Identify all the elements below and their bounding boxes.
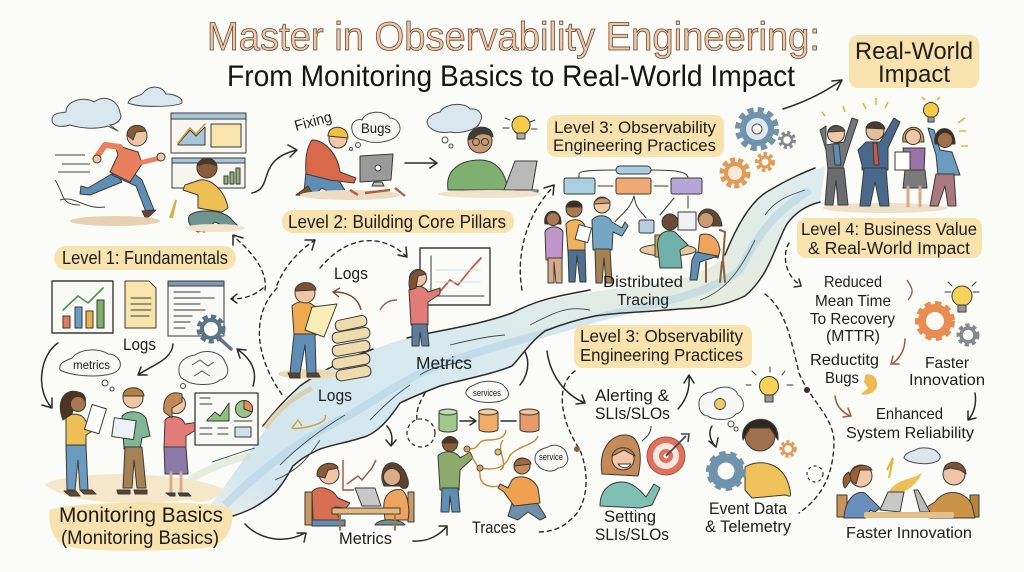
- label: Faster Innovation side: Faster: [925, 355, 970, 372]
- magnifier gear: [199, 317, 231, 349]
- trace path: [467, 430, 538, 487]
- woman: [600, 435, 660, 508]
- arrow: level 4 to outcomes: [785, 243, 801, 287]
- presentation board: [195, 393, 258, 445]
- label: Alerting and SLIs/SLOs: Alerting &: [595, 387, 669, 405]
- gears: top cluster: [722, 110, 794, 186]
- scene: celebrating team: [820, 97, 968, 213]
- label: Reduced MTTR: To Recovery: [810, 311, 895, 328]
- thought cloud: metrics: metrics: [73, 360, 110, 372]
- curved red mark: [380, 300, 397, 310]
- chart board: [420, 248, 490, 305]
- clouds: [52, 98, 121, 131]
- bar chart panel: [52, 281, 113, 333]
- label: Reduced MTTR: [810, 274, 895, 345]
- heading: Level 4: & Real-World Impact: [808, 238, 970, 258]
- heading: Real-World Impact: Real-World: [855, 38, 973, 65]
- lightbulb: [924, 102, 938, 122]
- outcome arrows: [835, 339, 976, 420]
- gear large: [709, 454, 743, 488]
- label: Distributed Tracing: [603, 274, 683, 309]
- label: Setting: [604, 508, 656, 526]
- label: Metrics bottom: Metrics: [339, 530, 392, 548]
- thought cloud: services: services: [473, 388, 501, 399]
- scene: level 1 panels: [52, 281, 231, 354]
- scene: event data and telemetry: [699, 367, 795, 536]
- river path: [190, 167, 825, 530]
- table: [864, 512, 954, 518]
- person: woman yellow: [60, 391, 106, 496]
- label: Logs at river: Logs: [318, 387, 352, 405]
- log pile: [331, 315, 372, 382]
- man: [925, 462, 979, 518]
- heading: Level 3 lower: [574, 325, 752, 368]
- dashboard window bottom: [172, 158, 245, 188]
- laptops: [880, 490, 930, 512]
- lightbulb: [746, 367, 793, 402]
- person: grey suit: [820, 118, 858, 205]
- label: Event Data: [709, 500, 788, 518]
- curved arrow: [333, 288, 361, 310]
- heading: Level 4: [797, 218, 982, 258]
- scene: runner and dashboards: [52, 87, 246, 232]
- scene: distributed tracing: [545, 166, 725, 283]
- thought cloud: metrics: [60, 350, 120, 391]
- chart: [343, 460, 376, 490]
- label: Faster Innovation side: Innovation: [909, 372, 985, 389]
- target: [647, 434, 689, 475]
- heading: Monitoring Basics: Monitoring Basics: [59, 503, 223, 527]
- dashed arrows: core pillars: [231, 185, 554, 396]
- thought cloud: [427, 104, 482, 133]
- dashboard window top: [171, 113, 246, 153]
- scene: traces: [407, 381, 568, 537]
- database orange: [478, 409, 498, 432]
- label: Enhanced System Reliability: Enhanced: [876, 406, 943, 423]
- heading: Level 3 lower: Level 3: Observability: [580, 326, 743, 346]
- thought cloud: [699, 387, 743, 420]
- swoosh arrow: [252, 145, 297, 193]
- label: Fixing: Fixing: [293, 109, 334, 135]
- thought cloud: chart: [179, 351, 228, 388]
- title line 2: From Monitoring Basics to Real-World Impact: [227, 60, 796, 93]
- dashed path: river to event data: [765, 294, 834, 513]
- arrow to Real-World Impact: [783, 80, 842, 109]
- label: Reducing bugs: Reductitg: [810, 352, 879, 369]
- thought cloud: service: [535, 445, 568, 471]
- label: Alerting and SLIs/SLOs: SLIs/SLOs: [595, 405, 670, 423]
- person: man orange: [566, 201, 592, 282]
- man: [305, 463, 350, 526]
- label: Distributed Tracing: Distributed: [603, 274, 683, 291]
- label: [705, 500, 792, 536]
- table: [332, 508, 400, 530]
- label: Traces: Traces: [472, 519, 516, 537]
- heading: Level 1: Level 1: Fundamentals: [62, 248, 228, 268]
- document: [125, 281, 156, 328]
- person with scroll: [288, 283, 337, 378]
- flow diagram: [564, 166, 702, 233]
- scene: logs: [278, 264, 372, 382]
- arrows around monitoring basics: [42, 343, 255, 408]
- database green: [439, 409, 457, 432]
- scene: fixing bugs: [293, 109, 405, 200]
- dashed circle: [407, 419, 435, 447]
- label: Metrics at river: Metrics: [416, 353, 472, 373]
- gear small: [781, 442, 795, 456]
- scene: metrics desk: [305, 460, 414, 530]
- cloud: [904, 448, 940, 464]
- database orange right: [520, 409, 539, 432]
- scene: monitoring basics team: [45, 350, 258, 503]
- spark: [885, 472, 922, 500]
- worker: [296, 127, 356, 197]
- desk and people: [640, 209, 725, 282]
- heading: Level 3 lower: Engineering Practices: [580, 345, 743, 365]
- woman: [375, 463, 414, 525]
- person: [409, 270, 440, 346]
- scene: engineer at laptop: [427, 104, 542, 198]
- laptop: [360, 154, 393, 186]
- arrow: [405, 158, 437, 168]
- person green: [438, 436, 473, 512]
- person: woman purple: [545, 211, 563, 283]
- label: Reduced MTTR: Mean Time: [815, 293, 891, 310]
- scene: setting SLIs/SLOs: [595, 426, 689, 544]
- heading: Real-World Impact: [849, 35, 979, 88]
- thought cloud: service: service: [539, 452, 563, 462]
- heading: Level 3 upper: Level 3: Observability: [554, 118, 716, 137]
- heading: Monitoring Basics: (Monitoring Basics): [61, 528, 219, 549]
- label: Reducing bugs: [810, 352, 879, 395]
- label: Reduced MTTR: Reduced: [824, 274, 882, 291]
- woman: [837, 465, 880, 518]
- person: man green: [112, 388, 150, 494]
- sand ground: [45, 474, 225, 503]
- person: man blue: [592, 197, 628, 283]
- label: Faster Innovation: [846, 525, 972, 542]
- lightbulb: [503, 116, 537, 139]
- label: Alerting and SLIs/SLOs: [595, 387, 670, 423]
- heading: Level 3 upper: Engineering Practices: [553, 136, 716, 155]
- thought cloud: services: [466, 381, 509, 402]
- heading: Real-World Impact: Impact: [878, 61, 950, 88]
- label: Enhanced System Reliability: System Reliability: [846, 425, 974, 442]
- label: Logs: Logs: [334, 264, 368, 283]
- label: Distributed Tracing: Tracing: [617, 292, 669, 309]
- icons: faster innovation gears and bulb: [907, 280, 979, 344]
- title line 1: Master in Observability Engineering:: [207, 15, 820, 59]
- person: woman purple: [895, 127, 927, 206]
- title: [207, 15, 820, 93]
- label: Faster Innovation side: [909, 355, 985, 389]
- label: [595, 508, 669, 544]
- heading: Monitoring Basics: [49, 502, 232, 551]
- log window: [168, 281, 224, 336]
- scene: faster innovation pair: [837, 448, 979, 542]
- person: woman blue: [928, 128, 960, 206]
- person: woman red: [164, 393, 205, 496]
- label: Logs: Logs: [123, 336, 156, 354]
- person: navy suit: [858, 118, 900, 206]
- person: [448, 127, 508, 190]
- scene: metrics presenter: [380, 248, 490, 346]
- running person: [80, 125, 165, 219]
- kneeling person: [498, 458, 546, 520]
- heading: Level 3 upper: [547, 115, 724, 157]
- laptop: [355, 488, 381, 506]
- thought cloud: Bugs: Bugs: [361, 120, 391, 136]
- kneeling person: [183, 158, 238, 232]
- arrows around alerting: [520, 351, 694, 409]
- heading: Level 2: Level 2: Building Core Pillars: [288, 212, 506, 232]
- dashed loop: traces to alerts: [537, 371, 586, 532]
- laptop: [472, 161, 538, 192]
- label: & Telemetry: [705, 518, 792, 536]
- label: Reduced MTTR: (MTTR): [826, 328, 880, 345]
- arrows: metrics row: [245, 426, 447, 542]
- label: Reducing bugs: Bugs: [825, 370, 859, 387]
- label: SLIs/SLOs: [595, 526, 669, 544]
- heading: Level 4: Level 4: Business Value: [801, 219, 977, 239]
- label: Enhanced System Reliability: [846, 406, 974, 442]
- person: [743, 419, 791, 498]
